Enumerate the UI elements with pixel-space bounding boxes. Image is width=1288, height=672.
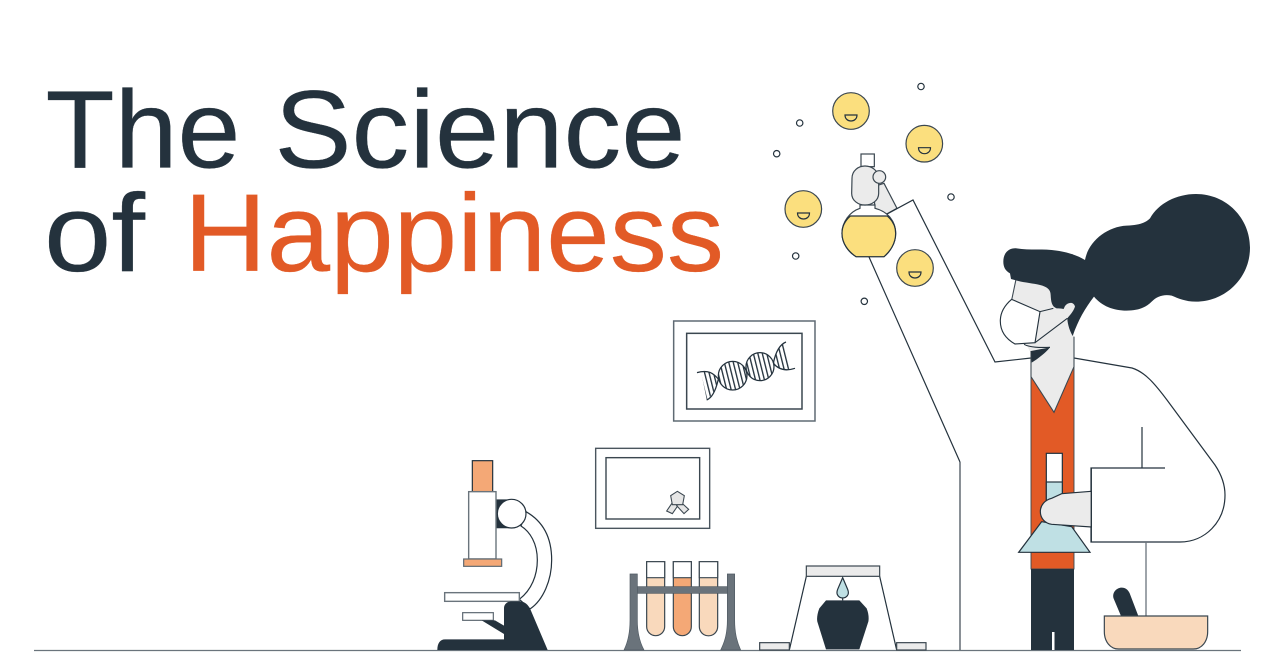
skin outline bbox=[1012, 279, 1074, 412]
focus knob bbox=[497, 499, 526, 528]
burner body bbox=[817, 600, 869, 649]
burner stand bbox=[760, 566, 926, 650]
cuff bbox=[1090, 468, 1093, 542]
coat hem line bbox=[1145, 542, 1147, 616]
scientist arm outline bbox=[869, 200, 1031, 462]
icon: DNA helix bbox=[697, 342, 795, 400]
flame bbox=[837, 578, 848, 600]
flask neck bbox=[1046, 453, 1062, 500]
wrist bbox=[873, 183, 897, 214]
title highlight word: Happiness bbox=[184, 172, 724, 295]
objective lens bbox=[464, 559, 502, 566]
head and hair bbox=[1000, 194, 1250, 412]
chin shadow bbox=[1031, 347, 1050, 363]
fingers bbox=[852, 166, 879, 205]
framed certificate bbox=[596, 448, 710, 528]
ear lobe bbox=[1060, 303, 1075, 318]
stand legs bbox=[789, 576, 897, 650]
hand bbox=[1040, 491, 1091, 527]
flask body bbox=[842, 205, 896, 257]
microscope bbox=[437, 461, 552, 650]
tube body bbox=[469, 492, 496, 559]
tube 1 bbox=[647, 562, 665, 636]
stand feet bbox=[760, 643, 926, 650]
microscope base bbox=[437, 601, 548, 650]
bubbles bbox=[774, 83, 954, 304]
tube 2 bbox=[673, 562, 691, 636]
smiley 1 bbox=[833, 93, 869, 129]
orange dress bbox=[1031, 358, 1074, 569]
pestle bbox=[1113, 588, 1138, 616]
raised arm holding flask bbox=[842, 154, 897, 257]
lab wall edge bbox=[959, 462, 961, 650]
lower stage bbox=[463, 613, 493, 620]
smiley 3 bbox=[785, 191, 822, 227]
floor line bbox=[34, 650, 1241, 652]
eyepiece bbox=[472, 461, 493, 492]
title bbox=[44, 68, 724, 295]
stand plate bbox=[806, 566, 880, 576]
test tubes in rack bbox=[624, 562, 741, 650]
tube 3 bbox=[699, 562, 718, 636]
rack bbox=[624, 574, 741, 650]
framed DNA picture bbox=[674, 321, 815, 421]
skin bbox=[1012, 275, 1074, 412]
stage bbox=[445, 593, 519, 601]
flask neck liquid bbox=[1046, 482, 1062, 502]
title word: of: of bbox=[44, 172, 145, 295]
mortar bbox=[1104, 616, 1208, 649]
smiley 4 bbox=[897, 250, 933, 286]
flask liquid bbox=[842, 216, 896, 257]
title word: The: The bbox=[46, 68, 240, 192]
smiley 2 bbox=[906, 125, 943, 162]
connector block bbox=[496, 500, 512, 528]
lab coat bbox=[1074, 358, 1225, 542]
flask cone bbox=[1019, 522, 1090, 552]
face mask bbox=[1000, 299, 1040, 344]
curved arm bbox=[519, 512, 552, 609]
trousers bbox=[1031, 569, 1074, 650]
thumb bbox=[873, 171, 886, 183]
flask neck top bbox=[861, 154, 874, 167]
conical flask and hand bbox=[1019, 453, 1091, 552]
hair bbox=[1003, 194, 1250, 336]
mortar and pestle bbox=[1104, 588, 1208, 649]
title word: Science: Science bbox=[274, 68, 686, 192]
icon: rosette seal bbox=[667, 491, 689, 514]
mask straps bbox=[1024, 308, 1067, 347]
